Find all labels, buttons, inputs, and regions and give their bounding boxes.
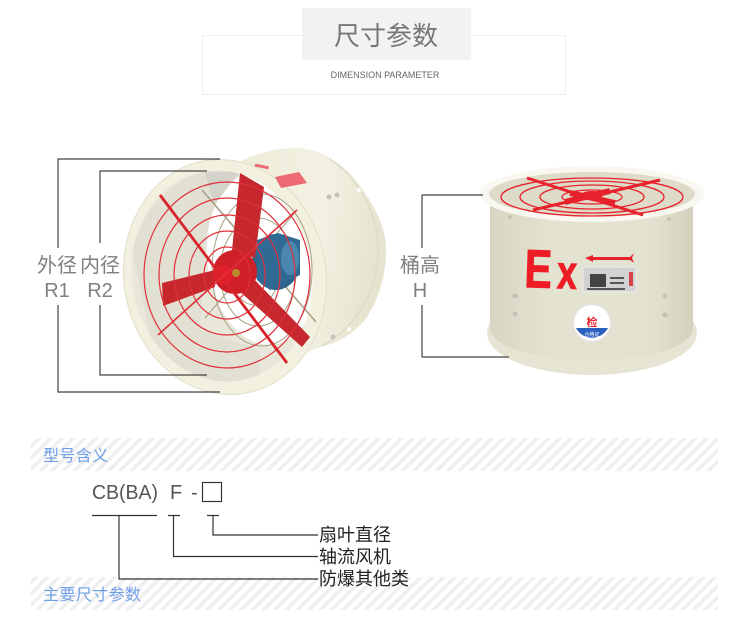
inspection badge: 合格证 [584,331,600,338]
header frame [202,36,566,94]
top guard [501,178,683,216]
motor [252,233,300,290]
label: blade diameter: 扇叶直径 [319,525,391,545]
model code: F [170,482,182,504]
dimension: inner diameter R2: 内径 [80,254,120,277]
top opening [489,172,695,216]
Ex marking on housing [255,164,307,188]
rear guard [202,190,316,346]
model code [92,482,222,504]
direction arrow [585,253,634,263]
label: axial fan: 轴流风机 [319,547,391,567]
fan: front view [123,148,386,395]
bottom flange [487,291,697,375]
fan blades [162,173,310,347]
dimension: outer diameter R1: 外径 [37,254,77,277]
code breakdown leader lines [92,516,318,579]
subtitle: DIMENSION PARAMETER [331,70,440,80]
fan: side view [480,166,704,375]
front rim [105,143,345,411]
section band: model meaning: 型号含义 [43,447,109,465]
inspection badge: 检 [586,315,598,329]
dimension: inner diameter R2: R2 [87,280,113,302]
dimension: barrel height H: 桶高 [400,254,440,277]
section band: main dimensions: 主要尺寸参数 [43,586,141,604]
dimension: inner diameter R2 [80,171,207,375]
inner opening [115,156,329,396]
barrel body [490,195,693,360]
dimension: barrel height H [400,195,509,357]
dimension: barrel height H: H [413,280,427,302]
section band: model meaning [31,438,718,471]
dimension: outer diameter R1: R1 [44,280,70,302]
rivets [508,215,671,318]
model code: CB(BA) [92,482,158,504]
fan housing [240,148,386,360]
label: explosion proof and others: 防爆其他类 [319,569,409,589]
dimension: outer diameter R1 [37,159,220,392]
section band: main dimensions [31,577,718,610]
model code: - [191,482,198,504]
title [302,8,471,60]
nameplate [583,267,636,292]
title: 尺寸参数 [334,21,438,51]
inspection badge [574,304,610,342]
top rim [480,166,704,222]
front guard [144,182,310,368]
Ex text: Ex [524,240,583,301]
